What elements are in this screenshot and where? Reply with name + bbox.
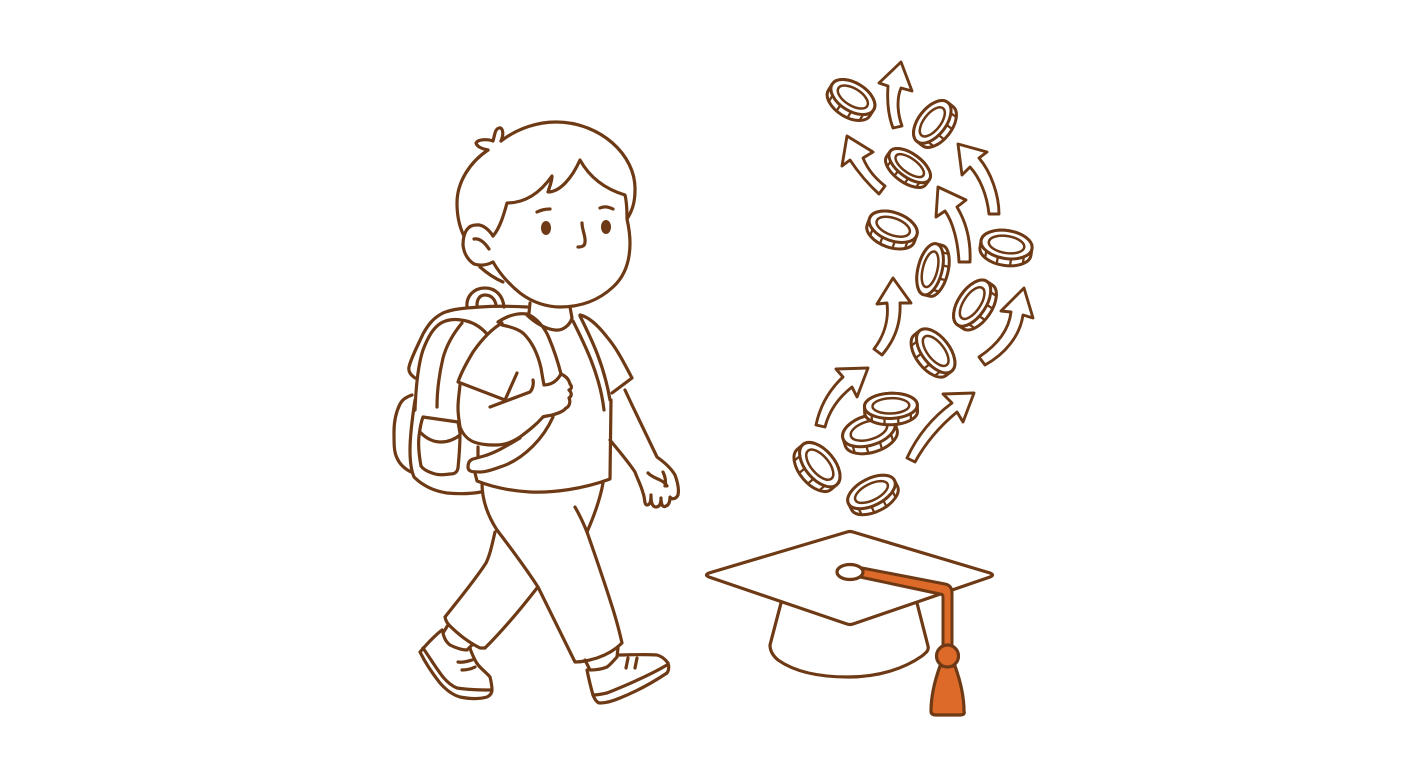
coin 7 (946, 274, 1004, 336)
coin 2 (906, 94, 964, 154)
backpack pocket (419, 417, 460, 475)
coin 11 (786, 435, 848, 499)
student figure (394, 122, 678, 703)
tassel (931, 666, 964, 715)
front foot: sock and shoe (585, 648, 669, 703)
right strap and sleeve (573, 315, 632, 410)
coin 8 (904, 322, 962, 384)
head and hair (457, 122, 635, 307)
tassel knot (936, 645, 958, 667)
arrow 4 (936, 187, 970, 262)
arrow 1 (879, 62, 912, 128)
coin 6 (978, 227, 1034, 269)
arrow 8 (907, 393, 974, 462)
cap body (770, 603, 928, 677)
coin 1 (821, 72, 881, 128)
coin 10 (839, 408, 901, 460)
neck and collar (527, 303, 572, 330)
near arm, sleeve and strap (458, 314, 571, 472)
shirt and torso (475, 400, 611, 492)
coin 4 (862, 205, 922, 255)
coin 9 (864, 392, 918, 426)
cap board (706, 532, 992, 624)
coin 5 (912, 241, 954, 299)
arrow 7 (816, 368, 868, 427)
arrow 2 (842, 136, 885, 194)
arrow 3 (958, 144, 999, 214)
arrow 5 (874, 278, 911, 355)
face: brows, eyes and nose (537, 207, 613, 247)
tassel cord (860, 568, 952, 650)
back foot: sock and shoe (420, 625, 492, 698)
coin 12 (842, 468, 904, 522)
arrow 6 (979, 288, 1033, 365)
graduation cap (706, 532, 992, 715)
arrows rising upward (816, 62, 1033, 462)
coin 3 (880, 142, 936, 194)
far arm and hand (610, 390, 678, 507)
cord button (837, 564, 863, 580)
coins falling (786, 72, 1034, 522)
pants (445, 483, 622, 662)
backpack (394, 288, 527, 494)
